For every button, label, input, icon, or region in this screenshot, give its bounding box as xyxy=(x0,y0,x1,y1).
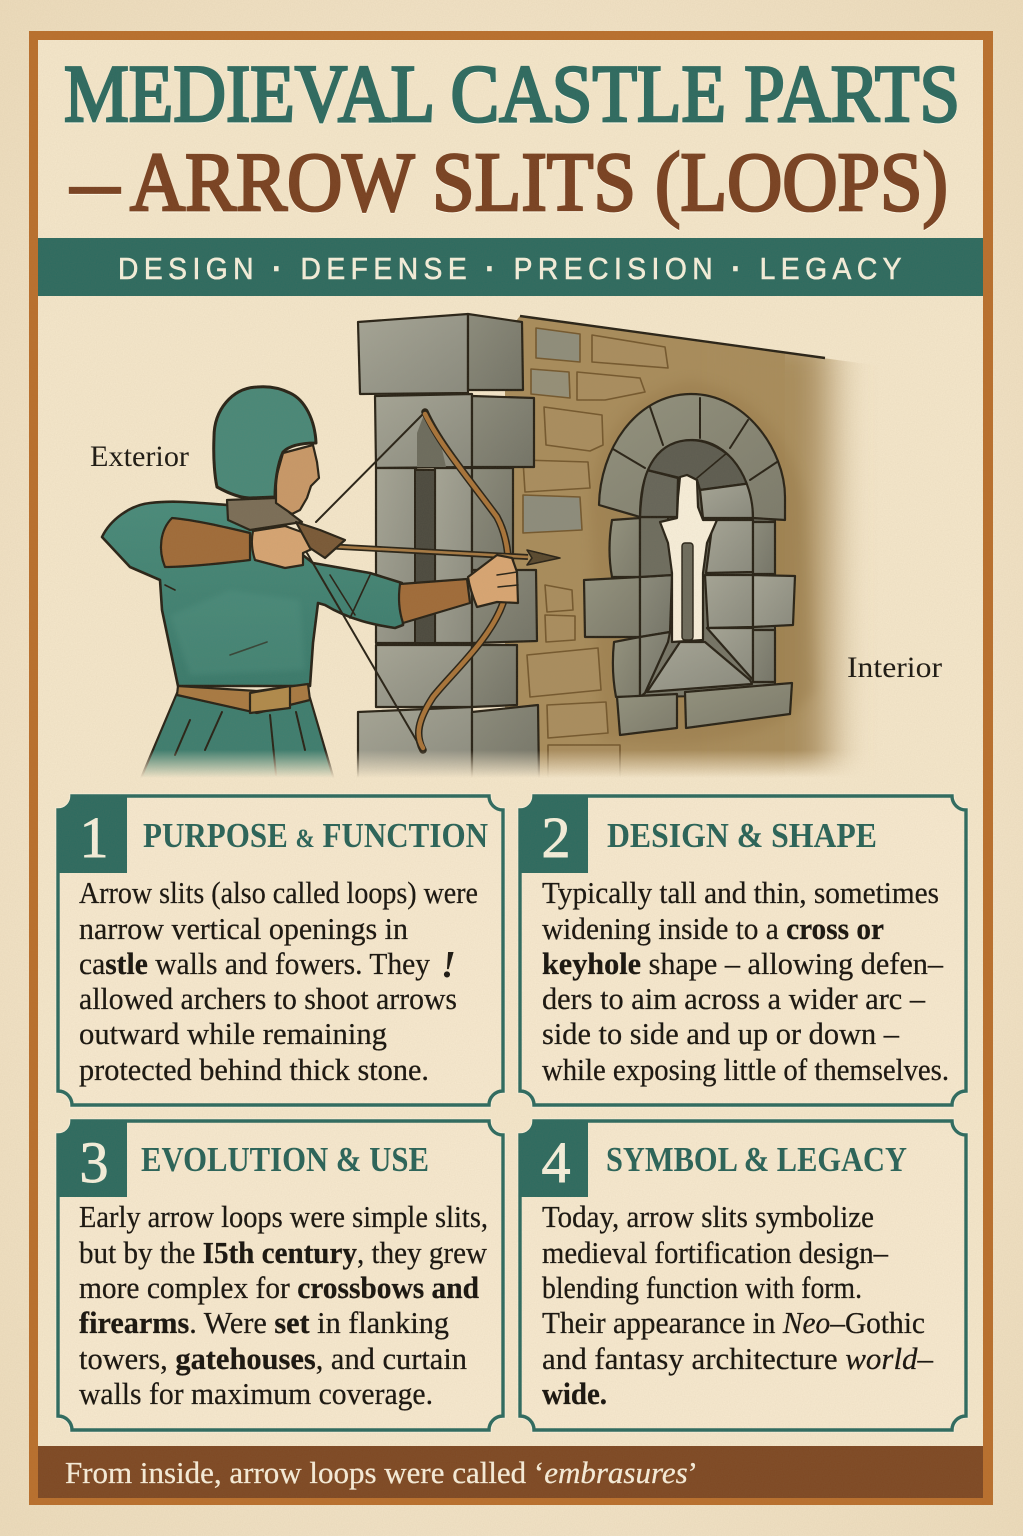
sloped sill xyxy=(647,642,752,692)
jamb stones xyxy=(584,440,795,697)
text block 4: and fantasy architecture world– xyxy=(542,1341,933,1376)
text block 4: Today, arrow slits symbolize xyxy=(542,1199,874,1234)
tunic xyxy=(102,502,403,686)
text block 1: Arrow slits (also called loops) were xyxy=(79,875,478,910)
panel 3: evolution and use xyxy=(58,1121,503,1430)
heading 2: DESIGN & SHAPE xyxy=(607,816,877,855)
text block 1: outward while remaining xyxy=(79,1016,387,1051)
number badge 4 xyxy=(520,1121,588,1197)
longbow xyxy=(419,412,508,750)
text block 2: widening inside to a cross or xyxy=(542,911,884,946)
bow hand xyxy=(468,555,518,607)
number badge 2 xyxy=(520,796,588,873)
text block 1: allowed archers to shoot arrows xyxy=(79,981,457,1016)
label: interior: Interior xyxy=(847,651,942,684)
text block 4: Their appearance in Neo–Gothic xyxy=(542,1305,925,1340)
text block 2: ders to aim across a wider arc – xyxy=(542,981,925,1016)
title line two: — xyxy=(69,136,121,229)
corner tower stones xyxy=(358,314,539,780)
text block 4: blending function with form. xyxy=(542,1270,862,1305)
number badge 1 xyxy=(58,796,127,873)
panel 1: purpose and function xyxy=(58,796,503,1105)
number badge 3 xyxy=(58,1121,127,1197)
heading 4: SYMBOL & LEGACY xyxy=(606,1140,907,1179)
arrow xyxy=(305,545,560,565)
text block 2: Typically tall and thin, sometimes xyxy=(542,875,939,910)
title xyxy=(64,48,960,229)
text block 2: while exposing little of themselves. xyxy=(542,1052,949,1087)
keyhole opening xyxy=(660,475,717,642)
stone wall face xyxy=(505,316,830,800)
exclamation mark: ! xyxy=(441,944,456,986)
lower sill stones xyxy=(617,683,792,735)
rear bracer xyxy=(161,518,250,567)
skirt xyxy=(136,693,337,790)
text block 1: narrow vertical openings in xyxy=(79,911,408,946)
text block 3: but by the I5th century, they grew xyxy=(79,1235,488,1270)
panel 2: design and shape xyxy=(520,796,966,1105)
archer xyxy=(102,387,560,790)
window arch xyxy=(599,394,785,520)
fade at bottom of illustration xyxy=(120,750,920,793)
text block 2 xyxy=(542,875,949,1087)
subtitle band: DESIGN · DEFENSE · PRECISION · LEGACY xyxy=(118,251,907,286)
number badge 3: 3 xyxy=(80,1130,108,1195)
front bracer xyxy=(399,579,470,623)
panel 4: symbol and legacy xyxy=(520,1121,966,1430)
illustration: archer at castle wall xyxy=(90,314,942,800)
text block 4 xyxy=(542,1199,933,1411)
footer band: From inside, arrow loops were called ‘embrasures’ xyxy=(65,1455,698,1490)
text block 2: keyhole shape – allowing defen– xyxy=(542,946,943,981)
text block 3 xyxy=(79,1199,488,1411)
arrow slit in tower xyxy=(415,470,435,643)
neck coif xyxy=(227,498,302,530)
text block 2: side to side and up or down – xyxy=(542,1016,899,1051)
label: exterior: Exterior xyxy=(90,440,189,473)
heading 1: PURPOSE & FUNCTION xyxy=(143,816,488,855)
number badge 4: 4 xyxy=(542,1130,570,1195)
text block 3: more complex for crossbows and xyxy=(79,1270,479,1305)
title line two: ARROW SLITS (LOOPS) xyxy=(130,136,948,229)
text block 1 xyxy=(79,875,478,1087)
text block 1: castle walls and fowers. They xyxy=(79,946,430,981)
interior window with keyhole opening xyxy=(584,394,795,735)
number badge 2: 2 xyxy=(542,805,570,870)
text block 3: Early arrow loops were simple slits, xyxy=(79,1199,488,1234)
text block 1: protected behind thick stone. xyxy=(79,1052,429,1087)
number badge 1: 1 xyxy=(80,805,108,870)
subtitle band xyxy=(38,238,983,296)
belt xyxy=(177,684,310,713)
text block 3: towers, gatehouses, and curtain xyxy=(79,1341,467,1376)
text block 3: firearms. Were set in flanking xyxy=(79,1305,449,1340)
text block 3: walls for maximum coverage. xyxy=(79,1376,433,1411)
face xyxy=(276,445,319,514)
heading 3: EVOLUTION & USE xyxy=(141,1140,429,1179)
text block 4: wide. xyxy=(542,1376,607,1411)
footer band xyxy=(38,1446,983,1498)
drawing hand xyxy=(252,522,345,568)
coif helmet xyxy=(214,387,316,498)
bowstring xyxy=(307,412,425,750)
text block 4: medieval fortification design– xyxy=(542,1235,888,1270)
